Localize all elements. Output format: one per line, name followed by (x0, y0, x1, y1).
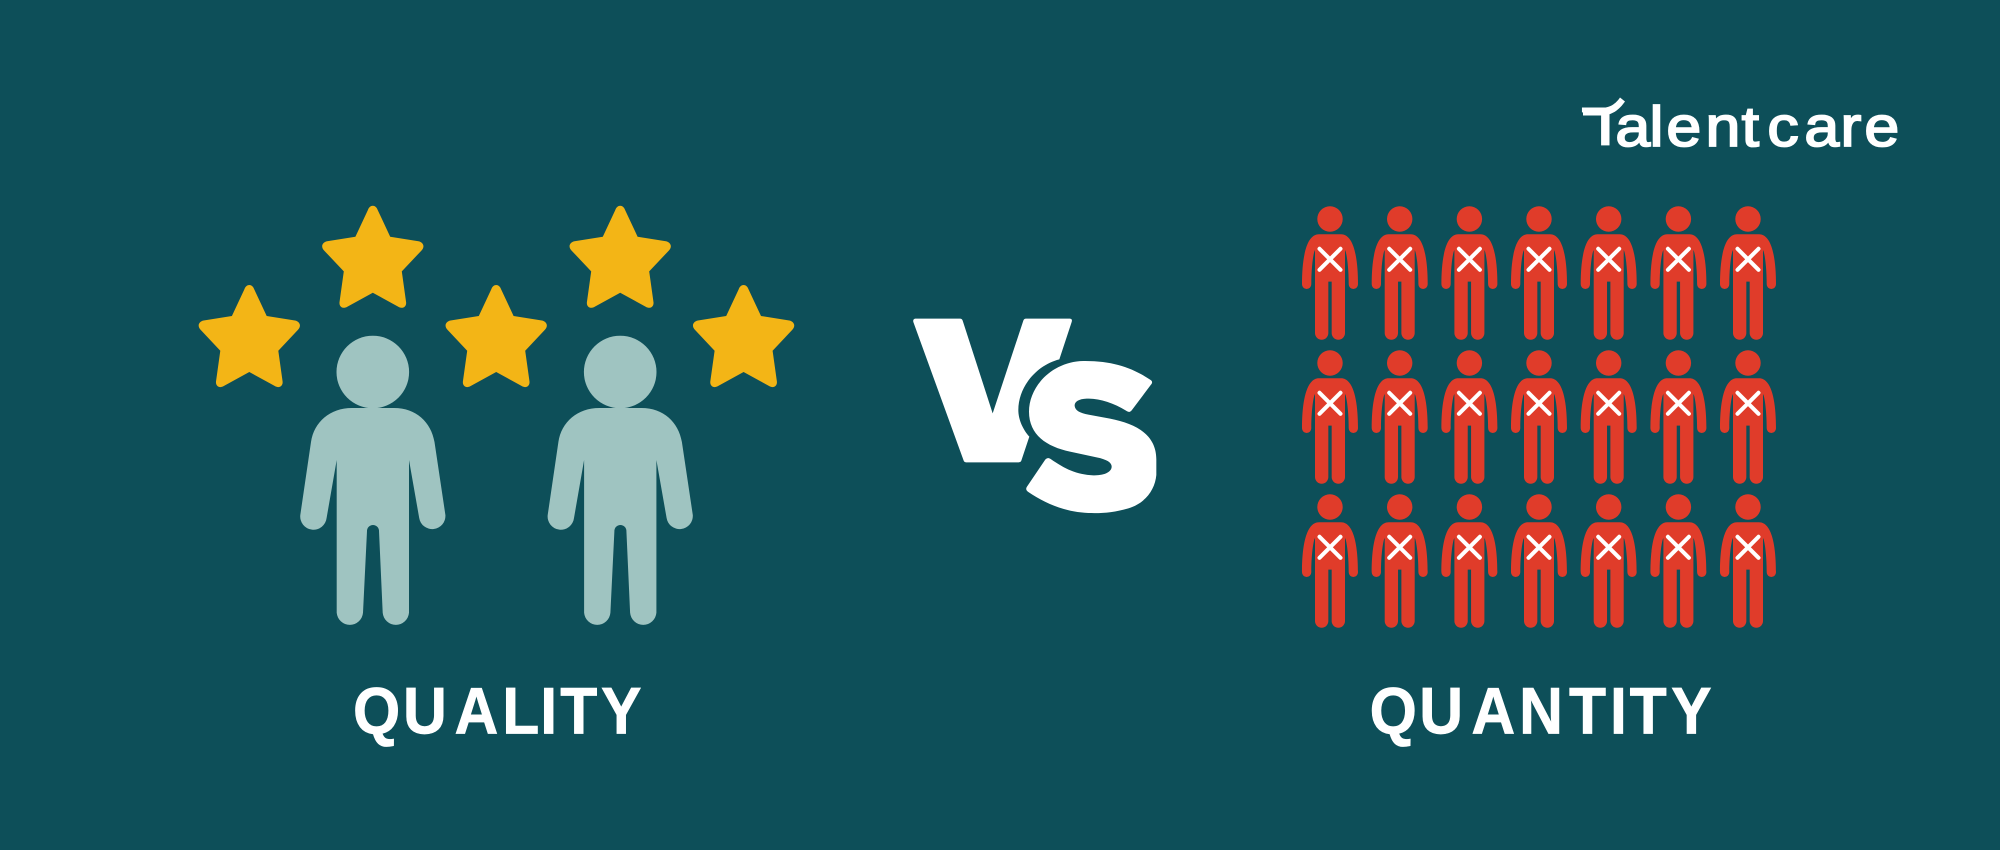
letter V (913, 319, 1072, 462)
letter S (1026, 361, 1156, 513)
icon: person 2 (548, 336, 693, 625)
logo: Talentcare (1582, 98, 1898, 148)
icon: star 1 (199, 285, 300, 387)
row 1 (1302, 206, 1776, 340)
heading: QUANTITY: QUANTITY (1370, 675, 1712, 748)
icon: person 1 (300, 336, 445, 625)
logo swoosh (1583, 98, 1625, 116)
logo wordmark: alentcare (1615, 95, 1899, 158)
row 2 (1302, 350, 1776, 484)
logo T: T (1581, 96, 1630, 157)
icon: star 2 (322, 206, 423, 308)
panel: quantity grid of crossed-out people (1302, 206, 1776, 628)
icon: VS mark (913, 319, 1156, 513)
icon: star 3 (446, 285, 547, 387)
icon: star 5 (693, 285, 794, 387)
panel: quality illustration (199, 206, 794, 625)
icon: star 4 (570, 206, 671, 308)
row 3 (1302, 494, 1776, 628)
heading: QUALITY: QUALITY (353, 675, 642, 748)
